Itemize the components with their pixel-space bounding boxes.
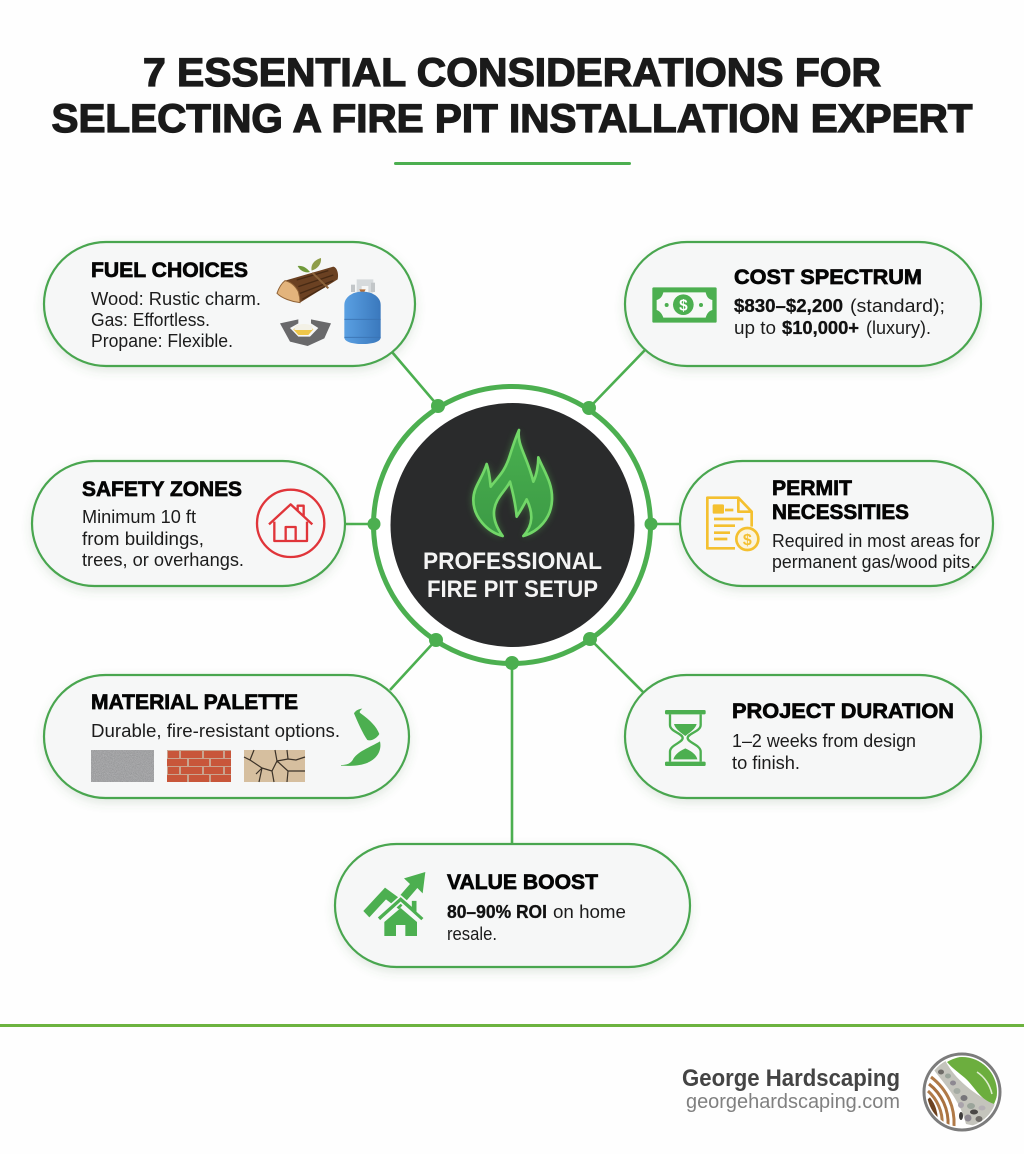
heading: permit necessities: NECESSITIES xyxy=(772,501,909,524)
text: safety distance xyxy=(82,507,244,570)
title: SELECTING A FIRE PIT INSTALLATION EXPERT xyxy=(52,97,972,141)
panel: cost spectrum xyxy=(625,242,981,366)
icon: permit document with coin xyxy=(707,498,758,550)
icon: propane tank xyxy=(344,279,381,344)
panel: fuel choices xyxy=(44,242,415,366)
logo leaf xyxy=(947,1055,1001,1104)
footer brand text: georgehardscaping.com xyxy=(686,1091,900,1113)
heading: safety zones: SAFETY ZONES xyxy=(82,478,242,501)
text: cost ranges xyxy=(734,296,945,338)
swatch: brick xyxy=(167,750,231,782)
hub disc xyxy=(390,403,634,647)
panel: project duration xyxy=(625,675,981,798)
connector lines xyxy=(345,350,680,844)
icon: permit document with coin: $ xyxy=(743,532,752,549)
logo xyxy=(924,1054,1001,1130)
panel: material palette xyxy=(44,675,409,798)
icon: wood log xyxy=(277,258,338,303)
icon: hourglass xyxy=(665,710,706,766)
panel: safety zones xyxy=(32,461,345,586)
text: fuel list: Gas: Effortless. xyxy=(91,310,210,330)
panel: permit necessities xyxy=(680,461,993,586)
logo stones band xyxy=(934,1061,995,1126)
hub label: PROFESSIONAL xyxy=(423,548,602,575)
text: cost ranges: up to xyxy=(734,318,776,338)
swatch: concrete xyxy=(91,750,154,782)
icon: banknote xyxy=(652,287,717,323)
text: fuel list: Propane: Flexible. xyxy=(91,331,233,351)
text: value note: 80–90% ROI xyxy=(447,902,547,922)
footer brand text xyxy=(682,1065,900,1113)
text: duration note: to finish. xyxy=(732,753,800,773)
text: permit note: Required in most areas for xyxy=(772,531,980,551)
hub label: FIRE PIT SETUP xyxy=(427,576,598,603)
footer rule xyxy=(0,1024,1024,1027)
footer brand text: George Hardscaping xyxy=(682,1065,900,1092)
text: safety distance: Minimum 10 ft xyxy=(82,507,196,527)
heading: permit necessities: PERMIT xyxy=(772,477,852,500)
text: duration note: 1–2 weeks from design xyxy=(732,731,916,751)
text: value note: on home xyxy=(553,902,626,922)
text: duration note xyxy=(732,731,916,773)
heading: fuel choices: FUEL CHOICES xyxy=(91,259,248,282)
hub nodes xyxy=(368,399,658,670)
text: cost ranges: (luxury). xyxy=(866,318,931,338)
text: fuel list: Wood: Rustic charm. xyxy=(91,289,261,309)
heading: permit necessities xyxy=(772,477,909,524)
icon: banknote: $ xyxy=(679,297,688,314)
heading: value boost: VALUE BOOST xyxy=(447,871,598,894)
hub label xyxy=(423,548,602,603)
heading: material palette: MATERIAL PALETTE xyxy=(91,691,298,714)
text: material note: Durable, fire-resistant options. xyxy=(91,721,340,741)
central hub xyxy=(368,386,658,670)
panel: value boost xyxy=(335,844,690,967)
icon: green flame xyxy=(473,430,552,536)
icon: gas burner xyxy=(280,319,331,346)
icon: house with rising arrow xyxy=(363,872,425,936)
text: safety distance: from buildings, xyxy=(82,529,204,549)
text: value note xyxy=(447,902,626,944)
title: 7 ESSENTIAL CONSIDERATIONS FOR xyxy=(143,51,881,95)
text: cost ranges: (standard); xyxy=(850,296,945,316)
text: fuel list xyxy=(91,289,261,351)
text: permit note xyxy=(772,531,980,572)
text: cost ranges: $10,000+ xyxy=(782,318,859,338)
swatch: flagstone xyxy=(244,750,305,782)
text: value note: resale. xyxy=(447,924,497,944)
hub ring xyxy=(374,386,650,664)
heading: project duration: PROJECT DURATION xyxy=(732,700,954,723)
text: safety distance: trees, or overhangs. xyxy=(82,550,244,570)
text: cost ranges: $830–$2,200 xyxy=(734,296,843,316)
title xyxy=(52,51,972,141)
heading: cost spectrum: COST SPECTRUM xyxy=(734,266,922,289)
logo wood arcs xyxy=(931,1077,954,1126)
text: permit note: permanent gas/wood pits. xyxy=(772,552,975,572)
icon: house in red circle xyxy=(257,490,324,557)
icon: green leaf xyxy=(341,709,380,766)
